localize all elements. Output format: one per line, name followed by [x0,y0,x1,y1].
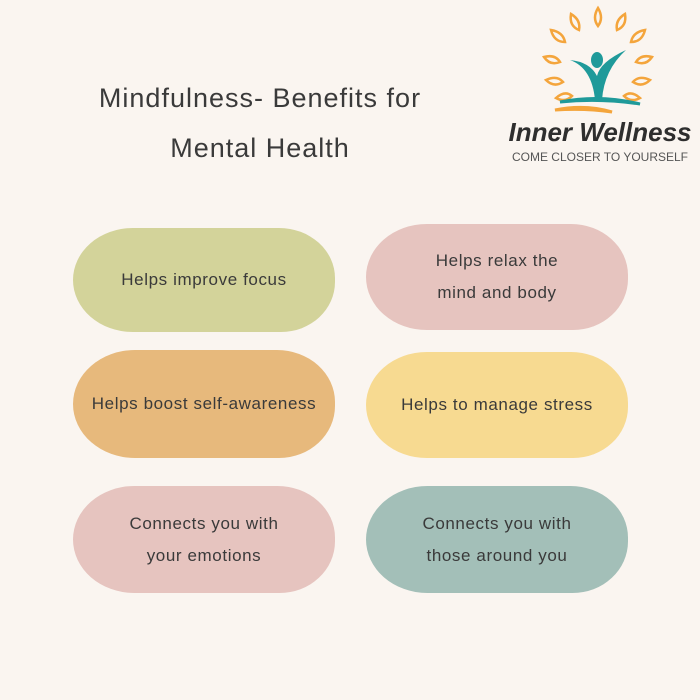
panel: self-awareness: Helps boost self-awareness [92,394,316,413]
title: Mental Health [170,133,350,163]
panel: relax [366,224,628,330]
panel: stress [366,352,628,458]
title [99,83,421,163]
panel: those around [366,486,628,593]
panel: emotions: Connects you with [129,514,279,532]
panel: focus: Helps improve focus [121,270,287,289]
title: Mindfulness- Benefits for [99,83,421,113]
brand name: Inner Wellness [508,117,692,147]
tagline: COME CLOSER TO YOURSELF [512,150,688,164]
panel: relax: mind and body [437,283,557,302]
logo [508,6,692,164]
panel: stress: Helps to manage stress [401,395,593,414]
panel: focus [73,228,335,332]
panel: relax: Helps relax the [436,251,558,270]
panel: emotions: your emotions [147,546,261,564]
panel: those around: Connects you with [422,514,572,532]
panel: self-awareness [73,350,335,458]
icon: sun with figure [542,6,654,114]
panel: emotions [73,486,335,593]
panel: those around: those around you [426,546,567,564]
